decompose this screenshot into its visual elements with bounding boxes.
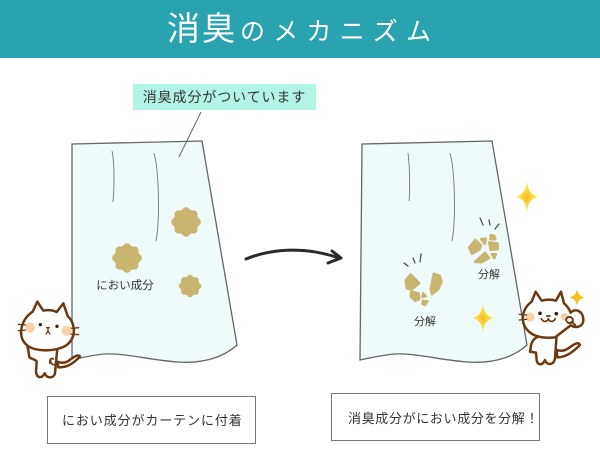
sparkle small	[571, 291, 583, 304]
left curtain	[72, 141, 237, 362]
odor particle small	[179, 275, 201, 297]
odor particle upper	[171, 207, 201, 237]
label: decomposed lower: 分解	[414, 314, 436, 328]
break lines lower	[404, 254, 421, 266]
label: odor component: におい成分	[96, 279, 154, 292]
left cat	[18, 302, 80, 377]
sparkle lower	[472, 303, 494, 333]
title banner: 消臭のメカニズム	[167, 10, 439, 47]
break lines upper	[480, 218, 499, 229]
right curtain	[360, 141, 527, 362]
broken particles	[406, 235, 498, 305]
arrow	[246, 250, 341, 263]
title banner	[0, 0, 600, 58]
callout: deodorizing component: 消臭成分がついています	[143, 89, 306, 105]
callout leader line	[179, 112, 201, 157]
odor particle large	[112, 243, 142, 273]
caption left: におい成分がカーテンに付着	[62, 413, 243, 428]
caption left	[47, 396, 256, 444]
callout: deodorizing component	[133, 84, 316, 110]
sparkle upper	[516, 181, 538, 213]
label: decomposed upper: 分解	[478, 267, 500, 281]
caption right	[331, 393, 540, 441]
right cat	[519, 292, 583, 364]
caption right: 消臭成分がにおい成分を分解！	[348, 411, 539, 426]
